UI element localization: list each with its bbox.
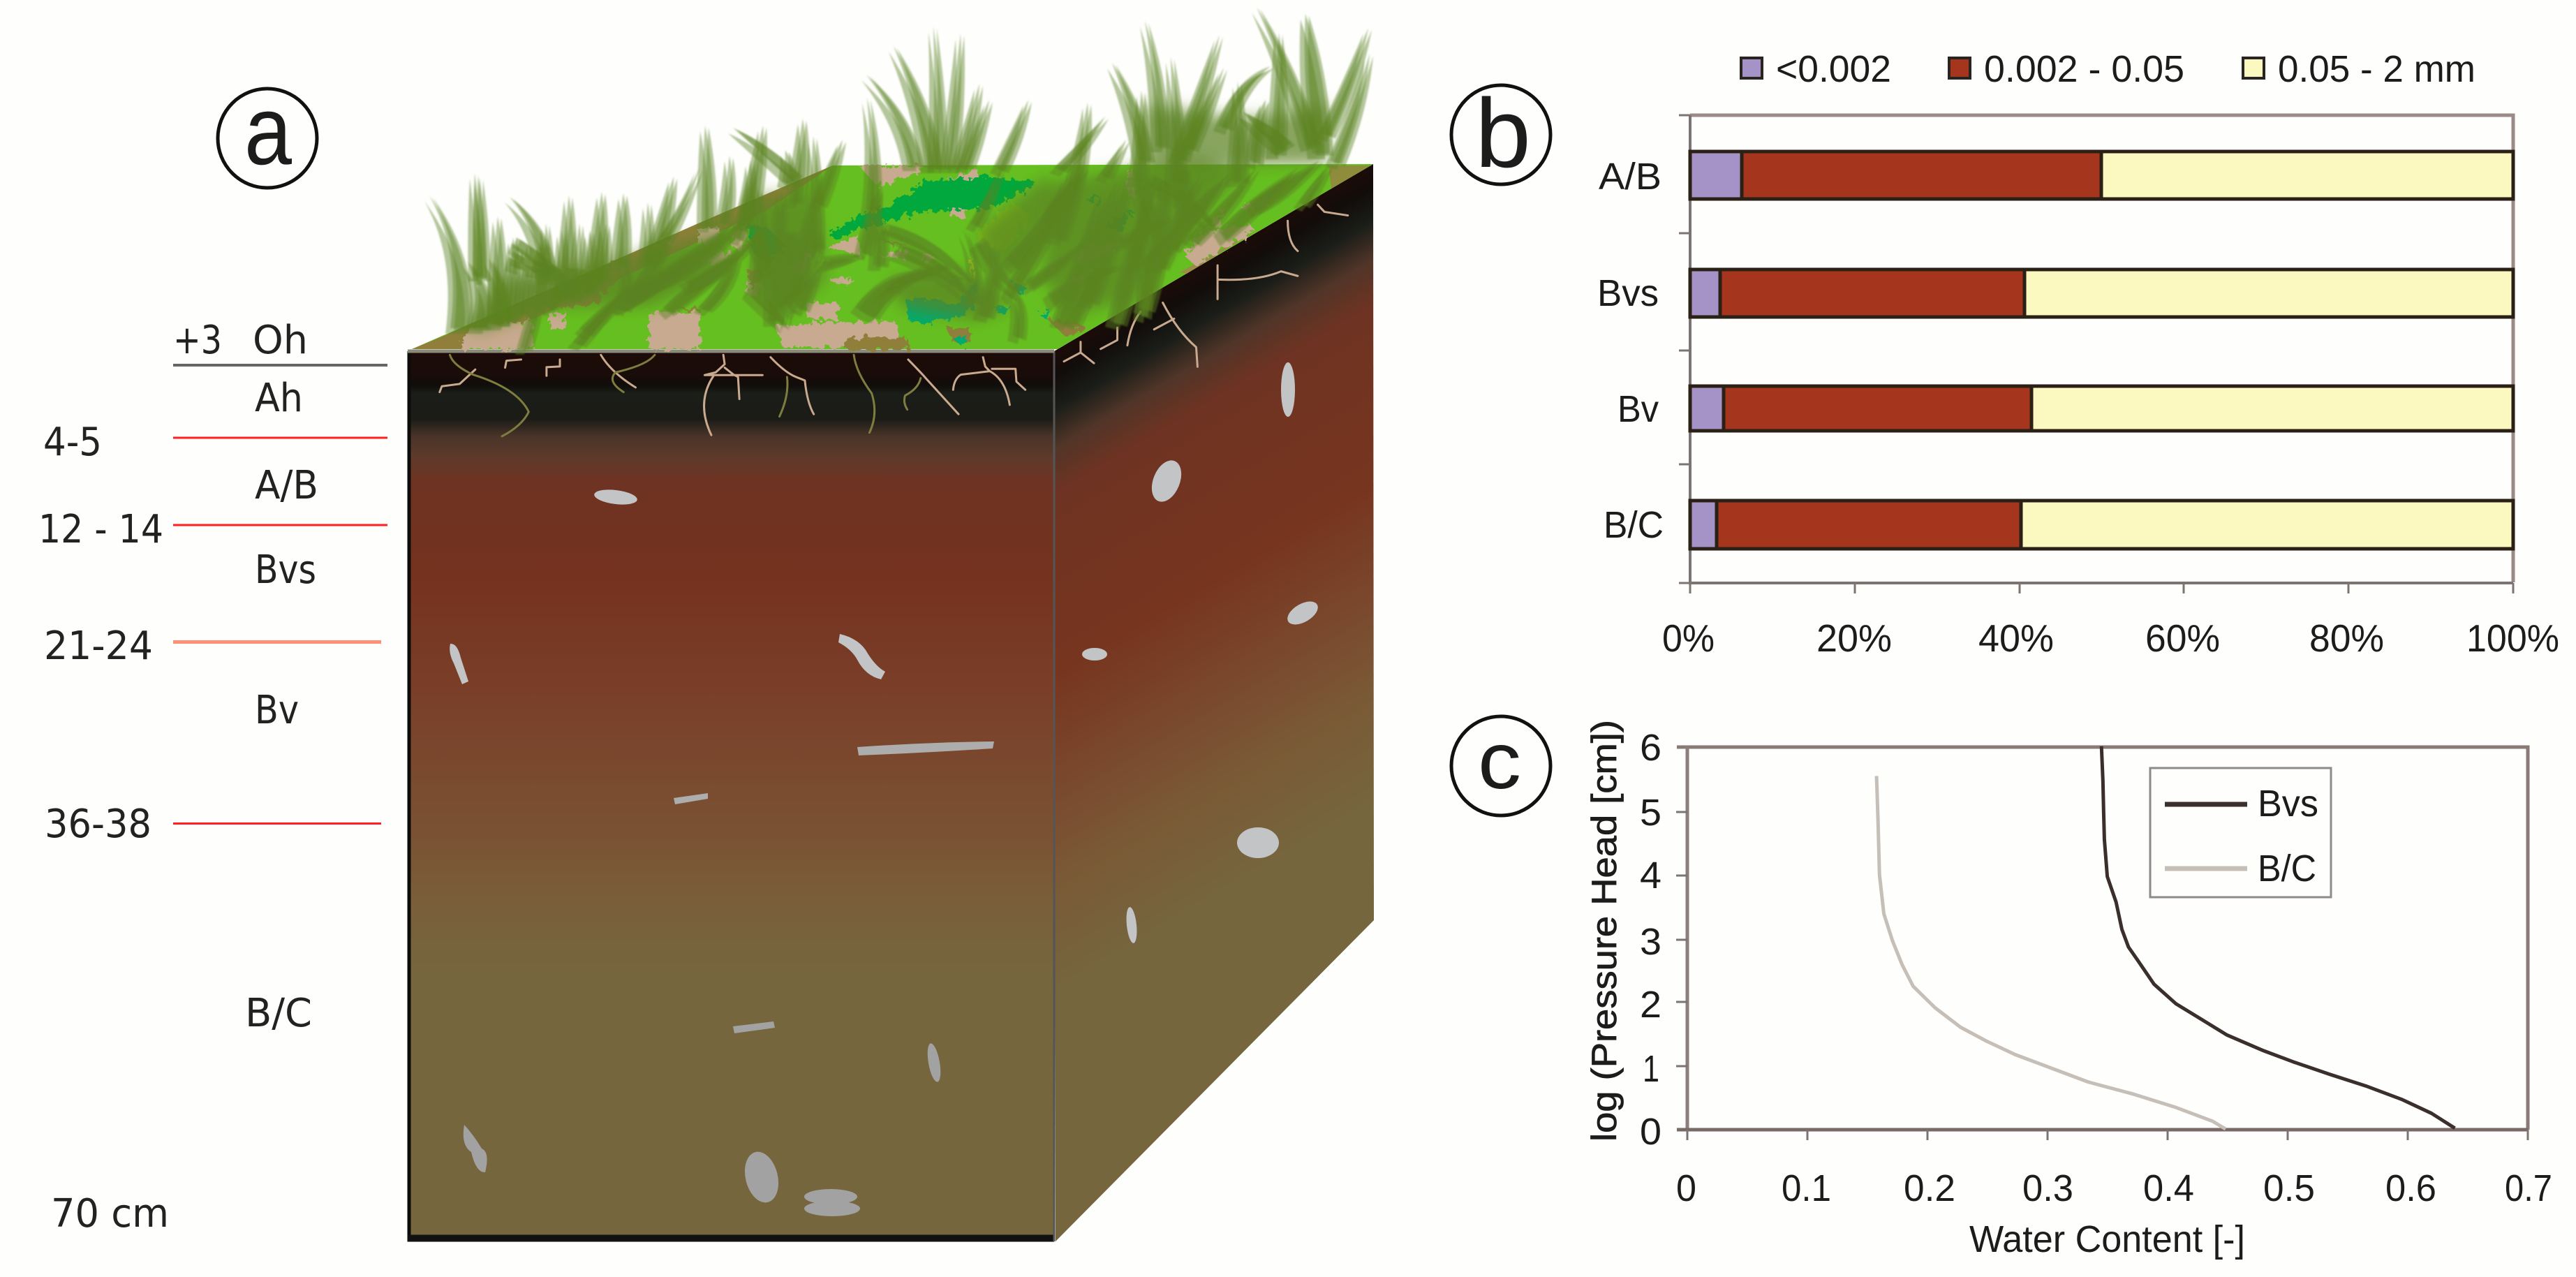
x axis numbers: 0.3 <box>2022 1167 2073 1209</box>
surface line <box>173 364 387 367</box>
panel marker a: a <box>244 75 292 185</box>
depth numbers: +3 <box>173 318 222 363</box>
legend: <0.002 <box>1776 48 1891 90</box>
legend: 0.05 - 2 mm <box>2278 48 2475 90</box>
grass shadow mass over the mat <box>468 105 1326 332</box>
x axis numbers: 0 <box>1676 1167 1696 1209</box>
percent axis labels: 0% <box>1662 617 1715 660</box>
panel marker b <box>1451 78 1550 188</box>
bar: A/B <box>1690 152 2513 199</box>
block front face <box>408 351 1054 1241</box>
x axis numbers: 0.5 <box>2263 1167 2315 1209</box>
horizon axis labels: Bv <box>1618 388 1659 430</box>
x axis numbers: 0.2 <box>1904 1167 1955 1209</box>
legend: 0.002 - 0.05 <box>1984 48 2184 90</box>
panel c: water retention chart <box>1585 720 2552 1260</box>
depth numbers: 21-24 <box>44 623 153 669</box>
horizon boundary lines <box>173 438 387 824</box>
y axis numbers: 0 <box>1640 1111 1661 1153</box>
panel a: soil block <box>408 7 1374 1241</box>
y axis numbers: 1 <box>1643 1048 1659 1090</box>
horizon labels and depth lines <box>38 318 387 1237</box>
x axis numbers: 0.6 <box>2385 1167 2436 1209</box>
depth numbers: 36-38 <box>45 802 151 847</box>
percent axis labels: 60% <box>2145 617 2220 660</box>
percent axis labels: 20% <box>1816 617 1892 660</box>
x axis numbers: 0.7 <box>2505 1167 2552 1209</box>
horizon names: Bvs <box>255 547 316 593</box>
depth numbers <box>38 318 222 1237</box>
horizon names: B/C <box>245 991 312 1036</box>
horizon axis labels: A/B <box>1599 156 1661 198</box>
curve legend <box>2150 768 2331 897</box>
horizon axis labels: B/C <box>1604 504 1664 546</box>
horizon names: Bv <box>255 688 299 733</box>
y axis numbers: 3 <box>1640 921 1661 963</box>
legend <box>1741 48 2475 90</box>
panel marker a <box>218 75 317 188</box>
y axis numbers: 2 <box>1640 984 1661 1026</box>
block right face <box>1054 164 1374 1241</box>
panel marker c: c <box>1478 716 1521 806</box>
horizon names: Ah <box>255 376 303 421</box>
panel b: particle size stacked bar chart <box>1597 48 2559 660</box>
curve: Bvs <box>2101 746 2455 1128</box>
soil surface mat <box>412 164 1373 350</box>
horizon names <box>245 318 318 1036</box>
curve: B/C <box>1877 776 2226 1129</box>
percent axis labels <box>1662 617 2559 660</box>
panel marker b: b <box>1475 78 1531 188</box>
plot frame <box>1679 115 2513 593</box>
bar: Bv <box>1690 386 2513 431</box>
y axis numbers <box>1640 727 1661 1153</box>
x axis numbers: 0.1 <box>1782 1167 1831 1209</box>
x axis title: Water Content [-] <box>1969 1218 2245 1260</box>
y axis numbers: 6 <box>1640 727 1661 769</box>
x axis numbers <box>1676 1167 2552 1209</box>
x axis numbers: 0.4 <box>2143 1167 2194 1209</box>
percent axis labels: 80% <box>2309 617 2384 660</box>
plot frame <box>1676 746 2528 1140</box>
horizon axis labels <box>1597 156 1664 546</box>
depth numbers: 4-5 <box>43 420 102 465</box>
percent axis labels: 40% <box>1978 617 2054 660</box>
roots on front face <box>440 355 1026 436</box>
horizon axis labels: Bvs <box>1597 272 1659 314</box>
bar: Bvs <box>1690 270 2513 317</box>
grass: all tufts <box>429 7 1370 349</box>
horizon names: Oh <box>253 318 308 363</box>
depth numbers: 70 cm <box>51 1191 169 1237</box>
stones on faces <box>450 362 1322 1216</box>
panel marker c <box>1451 716 1550 815</box>
depth numbers: 12 - 14 <box>38 507 163 552</box>
y axis numbers: 5 <box>1640 792 1661 834</box>
grass blades over the mat <box>424 7 1373 355</box>
roots on side face <box>1064 205 1348 367</box>
y axis numbers: 4 <box>1640 855 1661 896</box>
percent axis labels: 100% <box>2466 617 2559 660</box>
bar: B/C <box>1690 501 2513 549</box>
curve legend: Bvs <box>2258 783 2318 825</box>
horizon names: A/B <box>255 463 318 508</box>
y axis title: log (Pressure Head [cm]) <box>1585 720 1624 1142</box>
curve legend: B/C <box>2258 848 2316 890</box>
